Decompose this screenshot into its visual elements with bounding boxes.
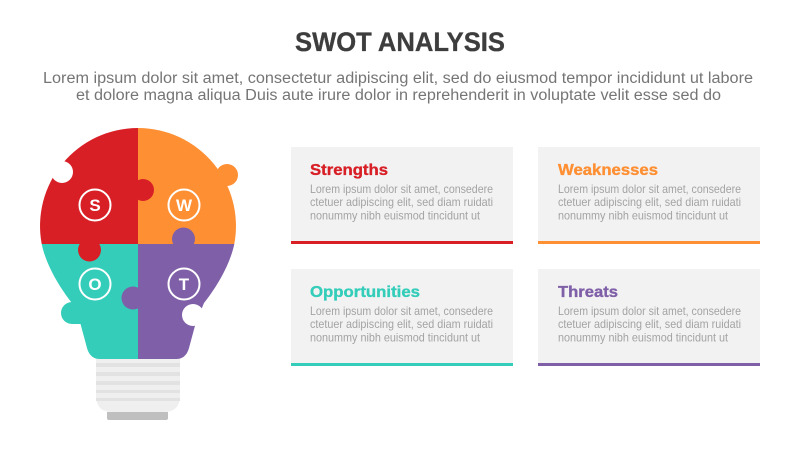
panel: opportunities: ctetuer adipiscing elit, sed diam ruidati	[310, 317, 493, 331]
panel: threats: nonummy nibh euismod tincidunt ut	[558, 330, 729, 344]
letter badge O: O	[88, 275, 102, 294]
letter badge T	[168, 268, 200, 300]
letter badge W: W	[176, 196, 193, 215]
subtitle text: Lorem ipsum dolor sit amet, consectetur adipiscing elit, sed do eiusmod tempor incididunt ut labore	[43, 70, 753, 87]
panel: threats	[538, 269, 760, 366]
letter badge W	[168, 190, 200, 220]
panel: threats: ctetuer adipiscing elit, sed diam ruidati	[558, 317, 741, 331]
puzzle piece: strengths	[40, 128, 154, 262]
panel: opportunities	[291, 269, 513, 366]
bulb cap	[107, 412, 168, 420]
panel: threats: Lorem ipsum dolor sit amet, consedere	[558, 304, 741, 318]
letter badge S: S	[89, 196, 101, 215]
puzzle piece: threats	[122, 244, 234, 359]
bulb screw base	[96, 358, 180, 412]
letter badge S	[80, 190, 110, 220]
panel: weaknesses: nonummy nibh euismod tincidunt ut	[558, 208, 729, 222]
panel: weaknesses: Weaknesses	[558, 162, 658, 179]
panel: opportunities: Lorem ipsum dolor sit amet, consedere	[310, 304, 493, 318]
panel: strengths: nonummy nibh euismod tincidunt ut	[310, 208, 481, 222]
letter badge T: T	[179, 275, 190, 294]
panel: weaknesses: ctetuer adipiscing elit, sed diam ruidati	[558, 195, 741, 209]
panel: weaknesses: Lorem ipsum dolor sit amet, consedere	[558, 182, 741, 196]
panel: strengths: ctetuer adipiscing elit, sed diam ruidati	[310, 195, 493, 209]
panel: strengths	[291, 147, 513, 244]
letter badge O	[80, 268, 110, 300]
panel: opportunities: nonummy nibh euismod tincidunt ut	[310, 330, 481, 344]
panel: strengths: Strengths	[310, 162, 388, 179]
lightbulb puzzle diagram	[40, 128, 238, 420]
panel: weaknesses	[538, 147, 760, 244]
puzzle piece: weaknesses	[138, 128, 238, 250]
subtitle text	[43, 70, 753, 104]
panel: strengths: Lorem ipsum dolor sit amet, consedere	[310, 182, 493, 196]
subtitle text: et dolore magna aliqua Duis aute irure dolor in reprehenderit in voluptate velit esse sed do	[76, 87, 721, 104]
puzzle piece: opportunities	[42, 244, 138, 359]
panel: threats: Threats	[558, 284, 618, 301]
panel: opportunities: Opportunities	[310, 284, 420, 301]
title: SWOT ANALYSIS	[295, 27, 505, 57]
